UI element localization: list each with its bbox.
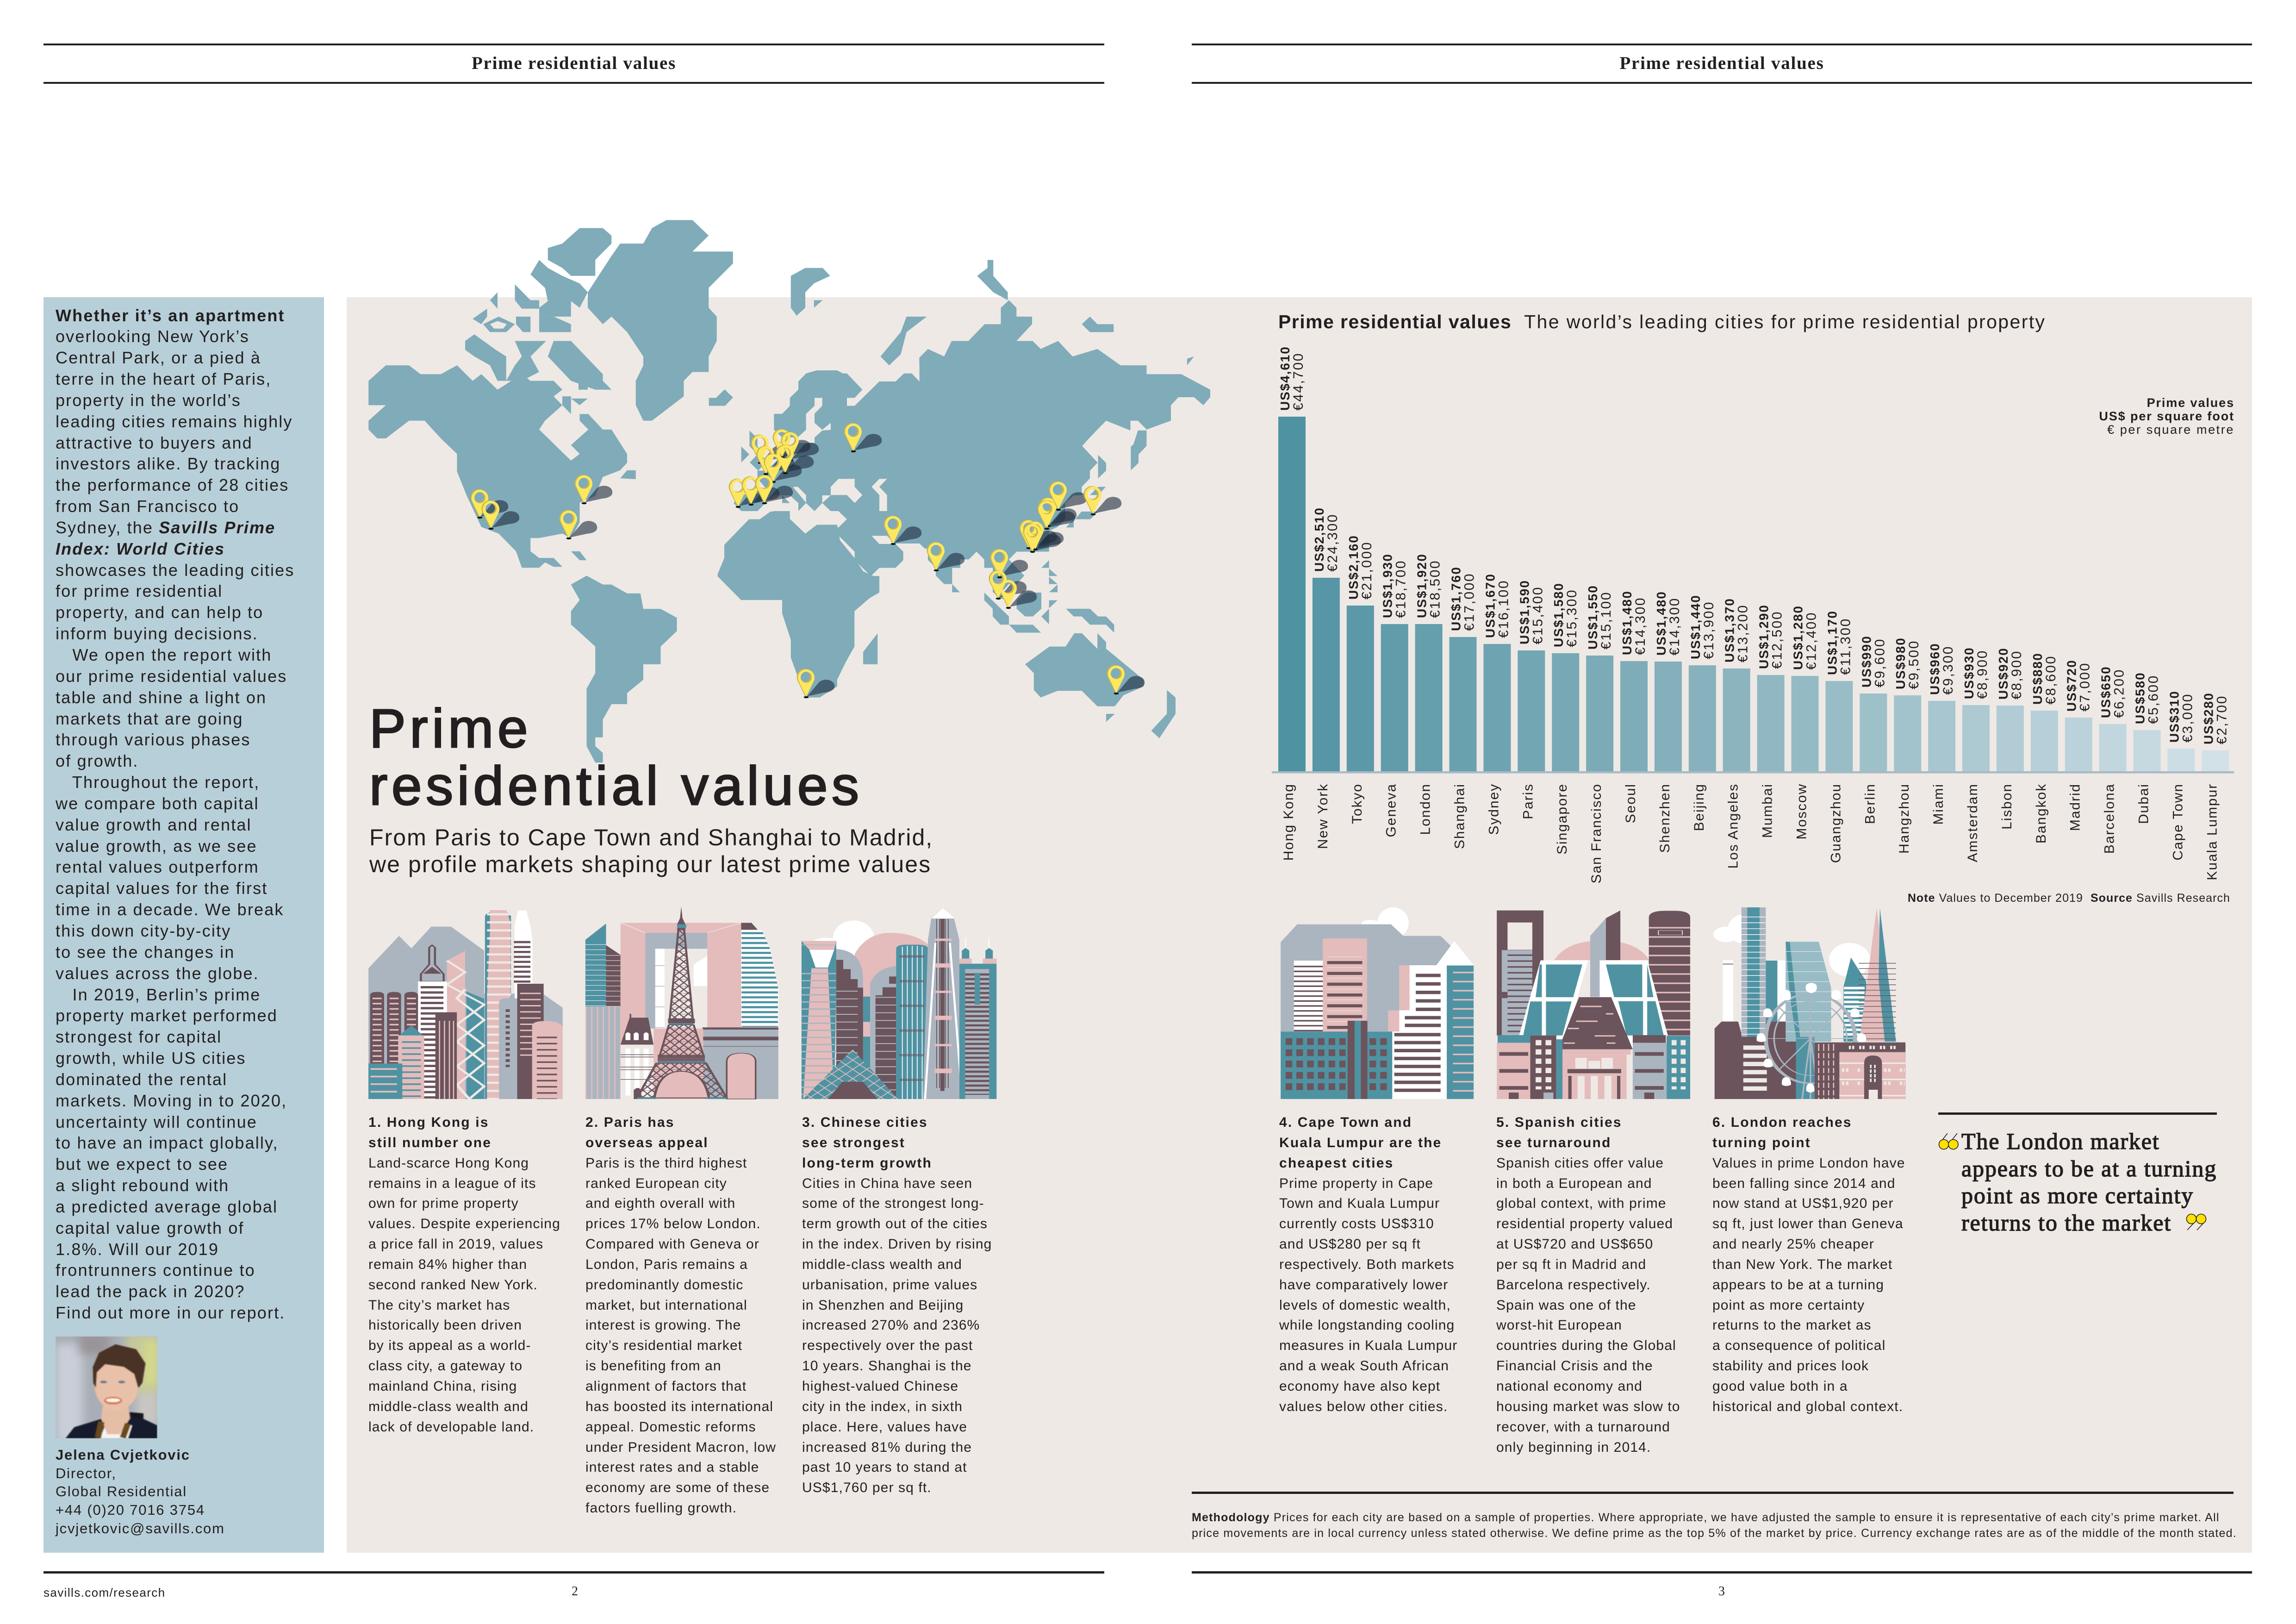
bar: Barcelona (2099, 666, 2127, 854)
text column 5: Spanish cities: 5. Spanish cities see turnaround Spanish cities offer value in both a European and global context, with prime residential property valued at US$720 and US$650 per sq ft in Madrid and Barcelona respectively. Spain was one of the worst-hit European countries during the Global Financial Crisis and the national economy and housing market was slow to recover, with a turnaround only beginning in 2014. (1496, 1115, 1680, 1455)
bar: Hong Kong: Hong Kong (1281, 783, 1296, 861)
bar: London: €18,500 (1428, 560, 1443, 618)
bar: Shenzhen: US$1,480 (1654, 591, 1668, 656)
bar: San Francisco: €15,100 (1599, 591, 1614, 650)
bar: Madrid: €7,000 (2078, 662, 2093, 712)
bar: Amsterdam: €8,900 (1975, 650, 1990, 699)
bar: Singapore: US$1,580 (1551, 582, 1566, 647)
text column 1: Hong Kong: 1. Hong Kong is still number one Land-scarce Hong Kong remains in a league of its own for prime property values. Despite experiencing a price fall in 2019, values remain 84% higher than second ranked New York. The city’s market has historically been driven by its appeal as a world- class city, a gateway to mainland China, rising middle-class wealth and lack of developable land. (368, 1115, 560, 1435)
bar: Sydney: US$1,670 (1483, 573, 1497, 638)
bar: New York (1312, 507, 1340, 849)
bar: Seoul: €14,300 (1633, 597, 1648, 655)
text column 4: Cape Town and Kuala Lumpur: 4. Cape Town and Kuala Lumpur are the cheapest cities Prime property in Cape Town and Kuala Lumpur currently costs US$310 and US$280 per sq ft respectively. Both markets have comparatively lower levels of domestic wealth, while longstanding cooling measures in Kuala Lumpur and a weak South African economy have also kept values below other cities. (1279, 1115, 1457, 1414)
bar: Beijing: €13,900 (1701, 601, 1717, 659)
bar: Dubai (2133, 672, 2161, 824)
bar: Geneva (1381, 553, 1409, 837)
bar: Mumbai: €12,500 (1770, 611, 1785, 669)
quote rule (1938, 1112, 2217, 1115)
bar: Lisbon: Lisbon (1999, 783, 2015, 830)
bar: Hangzhou: US$980 (1893, 637, 1908, 689)
east and south east asia (926, 440, 1146, 633)
pull quote: The London market appears to be at a turning point as more certainty returns to the market (1961, 1128, 2217, 1236)
page number 2: 2 (572, 1584, 578, 1599)
bar: Moscow: Moscow (1794, 783, 1810, 839)
bar: Hong Kong: €44,700 (1291, 352, 1306, 411)
bar: Paris: €15,400 (1530, 586, 1545, 644)
bar: Amsterdam: Amsterdam (1965, 783, 1980, 862)
bar: Barcelona: Barcelona (2102, 783, 2117, 854)
bar: New York: €24,300 (1325, 513, 1340, 572)
bar: Guangzhou: €11,300 (1838, 618, 1853, 675)
bar: Miami: Miami (1931, 783, 1946, 825)
bar: Tokyo: €21,000 (1359, 541, 1375, 600)
bar: Cape Town: Cape Town (2170, 783, 2185, 861)
subtitle: From Paris to Cape Town and Shanghai to Madrid, we profile markets shaping our latest prime values (369, 824, 933, 877)
bar: Hangzhou: €9,500 (1906, 640, 1922, 689)
bar: Seoul (1620, 590, 1648, 823)
bar: San Francisco: US$1,550 (1586, 585, 1600, 650)
bar: Hangzhou (1893, 637, 1922, 854)
bar: Cape Town: €3,000 (2180, 693, 2195, 743)
bar: Bangkok: €8,600 (2043, 655, 2059, 705)
bar: Tokyo (1346, 535, 1375, 824)
bar: Madrid (2065, 659, 2093, 831)
bar: Cape Town (2167, 690, 2195, 861)
arctic and pacific islands (709, 390, 733, 405)
bar chart: prime residential values (1272, 346, 2234, 883)
bar: London: US$1,920 (1415, 553, 1429, 618)
bar: Paris: Paris (1520, 783, 1536, 819)
australia and new zealand (1025, 633, 1144, 706)
skyline: Cape Town (1281, 907, 1474, 1099)
bar: Shenzhen: Shenzhen (1657, 783, 1673, 853)
text column 3: Chinese cities: 3. Chinese cities see strongest long-term growth Cities in China have seen some of the strongest long- term growth out of the cities in the index. Driven by rising middle-class wealth and urbanisation, prime values in Shenzhen and Beijing increased 270% and 236% respectively over the past 10 years. Shanghai is the highest-valued Chinese city in the index, in sixth place. Here, values have increased 81% during the past 10 years to stand at US$1,760 per sq ft. (802, 1115, 992, 1495)
bar: Sydney: Sydney (1486, 783, 1501, 835)
bar: Guangzhou (1825, 610, 1853, 863)
sidebar intro text: Whether it’s an apartment overlooking New York’s Central Park, or a pied à terre in the heart of Paris, property in the world’s leading cities remains highly attractive to buyers and investors alike. By tracking the performance of 28 cities from San Francisco to Sydney, the Savills Prime Index: World Cities showcases the leading cities for prime residential property, and can help to inform buying decisions. We open the report with our prime residential values table and shine a light on markets that are going through various phases of growth. Throughout the report, we compare both capital value growth and rental value growth, as we see rental values outperform capital values for the first time in a decade. We break this down city-by-city to see the changes in values across the globe. In 2019, Berlin’s prime property market performed strongest for capital growth, while US cities dominated the rental markets. Moving in to 2020, uncertainty will continue to have an impact globally, but we expect to see a slight rebound with a predicted average global capital value growth of 1.8%. Will our 2019 frontrunners continue to lead the pack in 2020? Find out more in our report. (56, 306, 294, 1322)
bar: Dubai: US$580 (2133, 672, 2147, 724)
bar: Dubai: Dubai (2136, 783, 2151, 824)
skyline: Paris (585, 906, 780, 1099)
bar: Berlin: €9,600 (1872, 638, 1887, 687)
bar: Moscow: €12,400 (1804, 612, 1819, 670)
bar: New York: US$2,510 (1312, 507, 1326, 572)
chart note and source: Note Values to December 2019 Source Savills Research (1908, 892, 2230, 905)
bar: Shanghai: Shanghai (1452, 783, 1467, 849)
right page heading: Prime residential values (1619, 53, 1824, 73)
bar: Shenzhen: €14,300 (1667, 597, 1682, 656)
text column 2: Paris: 2. Paris has overseas appeal Paris is the third highest ranked European city and eighth overall with prices 17% below London. Compared with Geneva or London, Paris remains a predominantly domestic market, but international interest is growing. The city’s residential market is benefiting from an alignment of factors that has boosted its international appeal. Domestic reforms under President Macron, low interest rates and a stable economy are some of these factors fuelling growth. (585, 1115, 776, 1516)
left page heading: Prime residential values (472, 53, 676, 73)
bar: Miami: €9,300 (1941, 645, 1956, 695)
bar: Beijing: US$1,440 (1688, 594, 1703, 659)
bar: Sydney: €16,100 (1496, 580, 1511, 638)
bar: Berlin: Berlin (1862, 783, 1878, 824)
bar: Moscow (1791, 605, 1819, 839)
bar: London: London (1418, 783, 1433, 835)
bar: Shenzhen (1654, 591, 1682, 853)
southern africa (717, 512, 877, 698)
bar: Shanghai: US$1,760 (1449, 566, 1463, 631)
methodology rule (1192, 1492, 2234, 1493)
bar: Shanghai: €17,000 (1462, 573, 1477, 631)
bar: Seoul: Seoul (1623, 783, 1638, 823)
bar: Singapore (1551, 582, 1580, 855)
footer right rule (1192, 1571, 2252, 1573)
bar: Kuala Lumpur: €2,700 (2214, 695, 2229, 744)
bar: Beijing (1688, 594, 1717, 831)
bar: Berlin (1859, 635, 1887, 824)
skyline: Spanish cities (1497, 911, 1690, 1099)
bar: Mumbai: US$1,290 (1757, 604, 1771, 669)
bar: New York: New York (1315, 783, 1331, 849)
bar: Los Angeles: Los Angeles (1726, 783, 1741, 868)
bar: Amsterdam (1962, 647, 1990, 862)
footer url: savills.com/research (44, 1586, 166, 1599)
footer left rule (44, 1571, 1104, 1573)
bar: Cape Town: US$310 (2167, 690, 2181, 743)
skyline: London (1713, 907, 1905, 1099)
bar: Paris (1517, 580, 1545, 819)
chart title: Prime residential values The world’s leading cities for prime residential property (1278, 311, 2046, 332)
header left rules (44, 44, 1104, 84)
bar: Lisbon: €8,900 (2009, 650, 2024, 700)
bar: Guangzhou: Guangzhou (1828, 783, 1843, 863)
bar: Singapore: €15,300 (1564, 589, 1580, 647)
bar: Geneva: Geneva (1384, 783, 1399, 837)
bar: Dubai: €5,600 (2146, 675, 2161, 724)
methodology note: Methodology Prices for each city are based on a sample of properties. Where appropriate, we have adjusted the sample to ensure it is representative of each city’s prime market. All price movements are in local currency unless stated otherwise. We define prime as the top 5% of the market by price. Currency exchange rates are as of the middle of the month stated. (1192, 1511, 2237, 1540)
bar: Kuala Lumpur: Kuala Lumpur (2204, 783, 2220, 881)
skyline: Hong Kong (368, 910, 563, 1099)
panel: blue sidebar (44, 297, 324, 1553)
bar: Miami (1928, 643, 1956, 825)
chart legend: Prime values US$ per square foot € per square metre (2099, 396, 2234, 437)
bar: Kuala Lumpur (2201, 692, 2229, 881)
main title: Prime residential values (369, 698, 863, 817)
map pin shadows (481, 434, 1145, 696)
bar: Bangkok (2030, 652, 2059, 843)
bar: Shanghai (1449, 566, 1477, 849)
bar: Barcelona: US$650 (2099, 666, 2113, 718)
photo: Jelena Cvjetkovic (56, 1336, 157, 1438)
bar: Hong Kong (1278, 346, 1306, 861)
bar: Los Angeles (1723, 598, 1751, 868)
bar: San Francisco: San Francisco (1589, 783, 1604, 883)
bar: Seoul: US$1,480 (1620, 590, 1634, 655)
bar: Guangzhou: US$1,170 (1825, 610, 1839, 675)
bar: Geneva: €18,700 (1394, 560, 1409, 618)
bar: Bangkok: Bangkok (2034, 783, 2049, 843)
header right rules (1192, 44, 2252, 84)
bar: Tokyo: Tokyo (1350, 783, 1365, 824)
icon: opening quote mark (1939, 1133, 1958, 1149)
bar: Moscow: US$1,280 (1791, 605, 1805, 670)
skyline: Chinese cities (802, 908, 996, 1099)
bar: Los Angeles: €13,200 (1736, 604, 1751, 662)
bar: Beijing: Beijing (1692, 783, 1707, 831)
bar: London (1415, 553, 1443, 835)
bar: Mumbai: Mumbai (1760, 783, 1775, 838)
north and south america (368, 220, 1210, 762)
world map (368, 220, 1210, 762)
bar: Hong Kong: US$4,610 (1278, 346, 1292, 411)
bar: Lisbon (1996, 647, 2024, 830)
bar: Madrid: US$720 (2065, 659, 2079, 712)
page number 3: 3 (1718, 1584, 1725, 1599)
bar: San Francisco (1586, 585, 1614, 883)
bar: Hangzhou: Hangzhou (1897, 783, 1912, 854)
bar: Miami: US$960 (1928, 643, 1942, 695)
text column 6: London: 6. London reaches turning point Values in prime London have been falling since 2014 and now stand at US$1,920 per sq ft, just lower than Geneva and nearly 25% cheaper than New York. The market appears to be at a turning point as more certainty returns to the market as a consequence of political stability and prices look good value both in a historical and global context. (1712, 1115, 1905, 1414)
bar: Sydney (1483, 573, 1511, 835)
bar: Bangkok: US$880 (2030, 652, 2045, 705)
bar: Lisbon: US$920 (1996, 647, 2010, 700)
bar: Los Angeles: US$1,370 (1723, 598, 1737, 662)
bar: Kuala Lumpur: US$280 (2201, 692, 2215, 744)
bar: Madrid: Madrid (2068, 783, 2083, 831)
map pins (470, 423, 1125, 698)
icon: closing quote mark (2186, 1214, 2206, 1230)
contact details: Jelena Cvjetkovic Director, Global Residential +44 (0)20 7016 3754 jcvjetkovic@savills.com (56, 1447, 225, 1537)
panel: beige background (347, 297, 2252, 1553)
bar: Amsterdam: US$930 (1962, 647, 1976, 699)
bar: Geneva: US$1,930 (1381, 553, 1395, 618)
bar: Mumbai (1757, 604, 1785, 838)
bar: Paris: US$1,590 (1517, 580, 1531, 644)
bar: Singapore: Singapore (1555, 783, 1570, 855)
europe, africa north and middle east (709, 370, 926, 602)
bar: Berlin: US$990 (1859, 635, 1873, 687)
bar: Barcelona: €6,200 (2112, 668, 2127, 718)
northern asia (919, 300, 1210, 452)
bar: Tokyo: US$2,160 (1346, 535, 1361, 600)
